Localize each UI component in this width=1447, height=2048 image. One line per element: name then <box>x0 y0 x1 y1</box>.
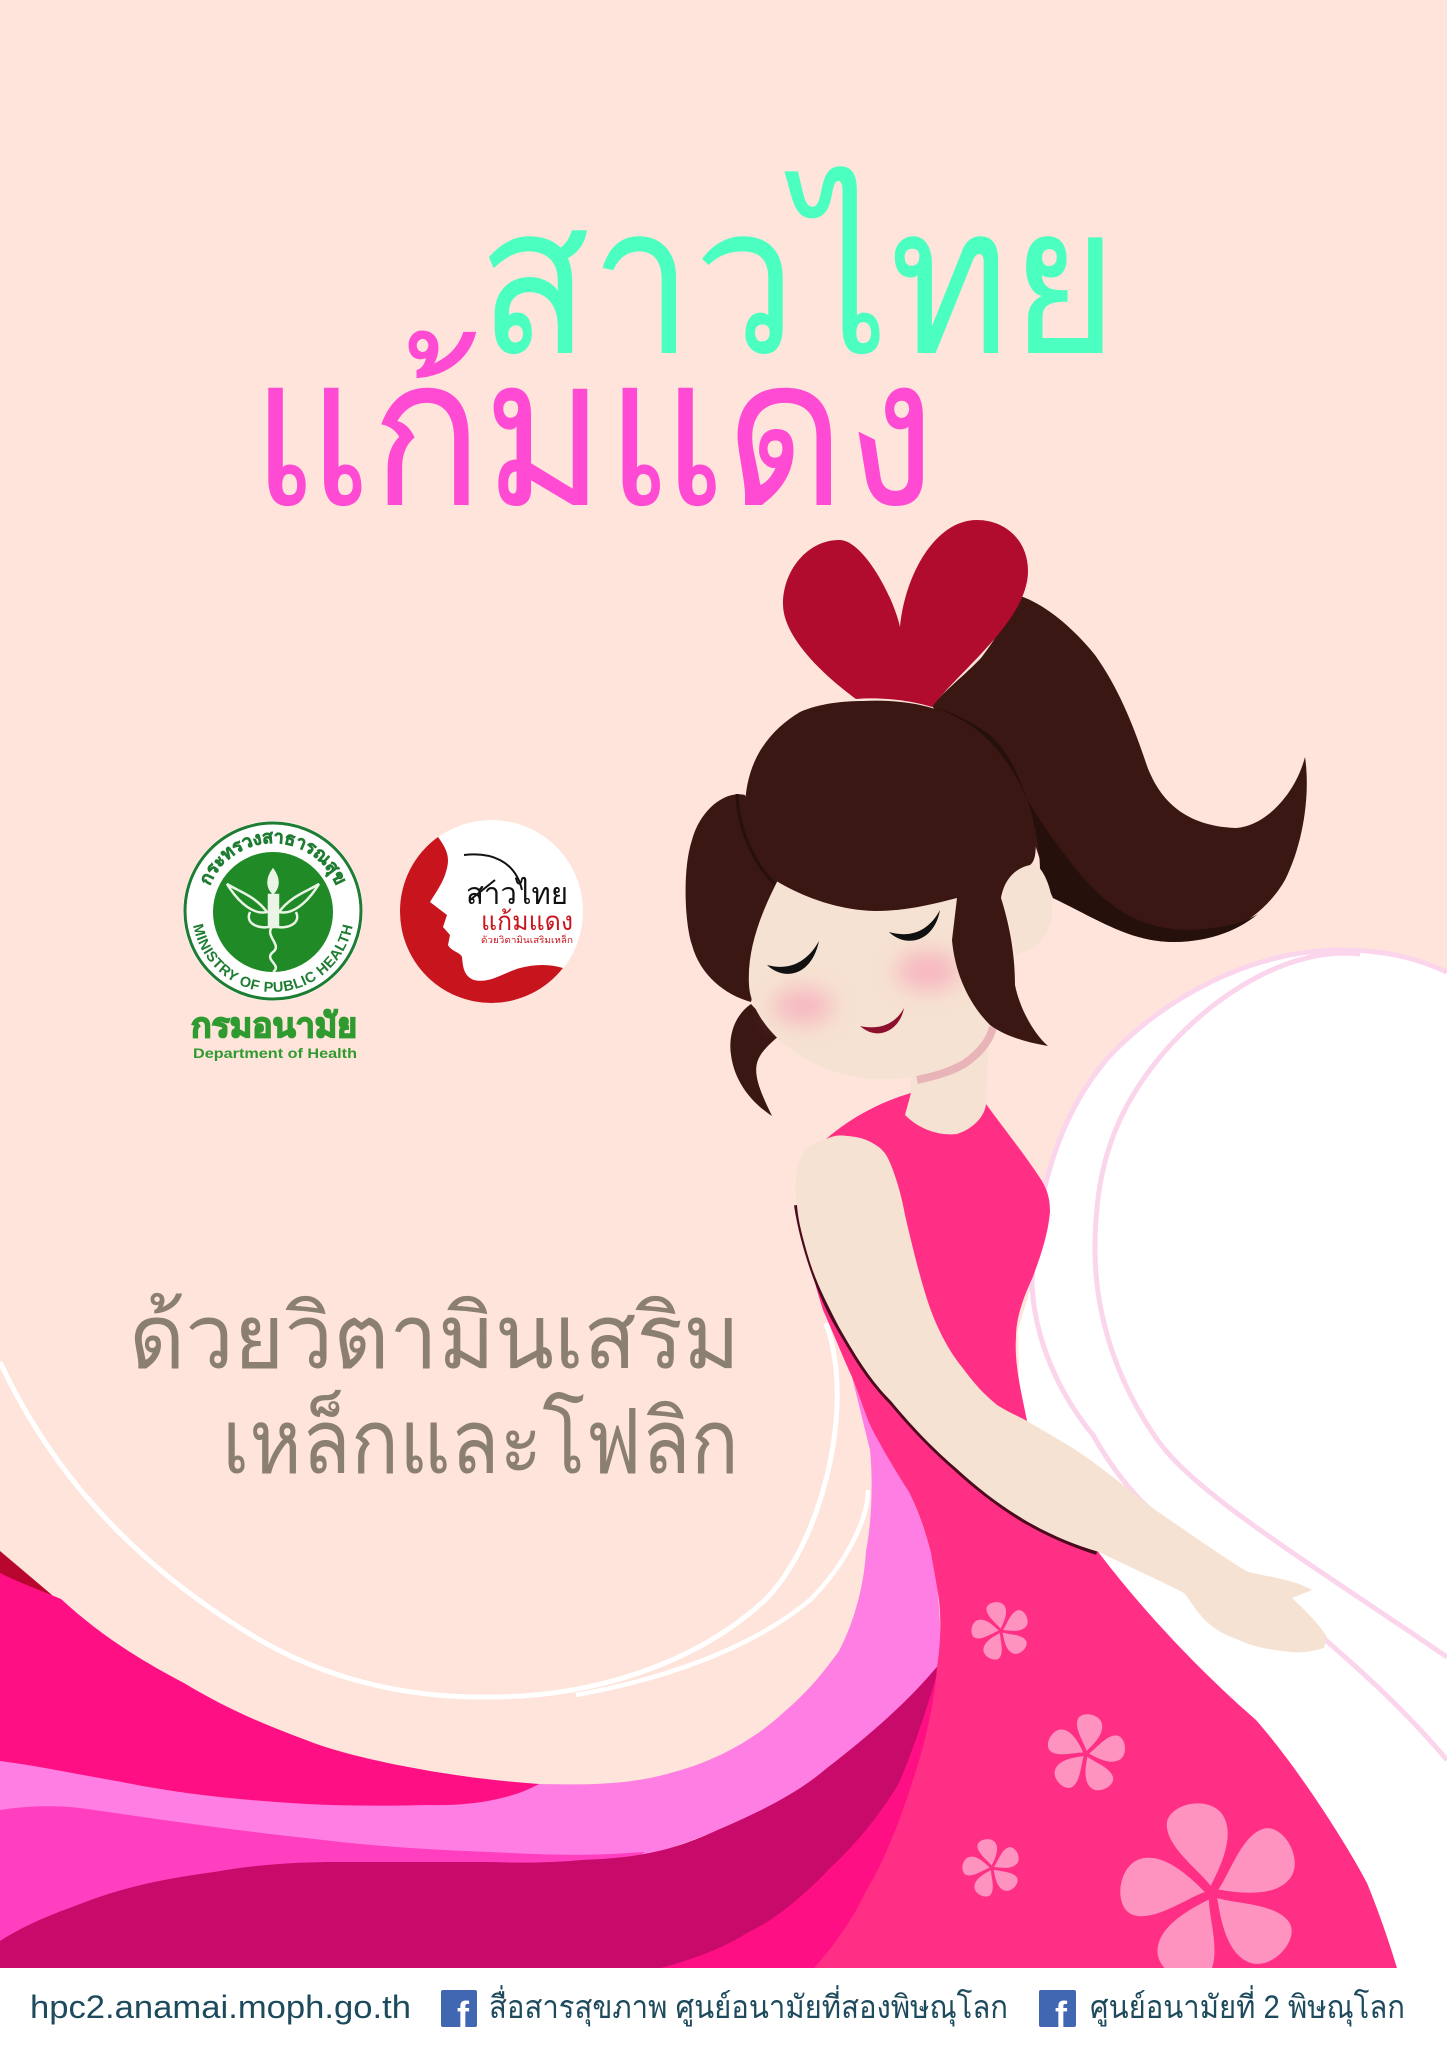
footer band <box>0 1968 1447 2048</box>
logo: ministry of public health emblem: MINISTRY OF PUBLIC HEALTH <box>193 924 352 992</box>
wave: deep pink <box>0 1663 940 1968</box>
white sheet behind the girl <box>1018 950 1447 1968</box>
heart bow <box>783 520 1028 707</box>
hair: fringe and side lock <box>745 701 1048 1046</box>
icon: facebook two <box>1039 1990 1076 2035</box>
flowers on dress <box>956 1597 1322 2002</box>
hair: bun line <box>737 794 775 884</box>
mouth <box>860 1008 904 1033</box>
hair: left bun <box>686 794 778 1002</box>
icon: facebook one: f <box>457 1994 470 2035</box>
hair: ponytail shadow <box>932 706 1258 942</box>
dress <box>799 1093 1397 1968</box>
swoosh: white line two <box>576 1490 868 1695</box>
footer: facebook page two: ศูนย์อนามัยที่ 2 พิษณุโลก <box>1090 1985 1405 2027</box>
title: แก้มแดง: แก้มแดง <box>251 317 936 550</box>
eye left <box>767 941 819 974</box>
footer: facebook page one: สื่อสารสุขภาพ ศูนย์อนามัยที่สองพิษณุโลก <box>489 1985 1008 2027</box>
girl <box>686 520 1397 2002</box>
wave: magenta <box>0 1806 645 1960</box>
ear <box>1003 861 1052 955</box>
neck <box>905 1050 988 1134</box>
logo: thai red cheeks campaign: ด้วยวิตามินเสริมเหล็ก <box>481 933 573 945</box>
hair: ponytail <box>932 595 1307 942</box>
blush right <box>896 951 960 991</box>
logo: thai red cheeks campaign <box>400 820 583 1003</box>
logo: thai red cheeks campaign: แก้มแดง <box>481 906 573 936</box>
footer: website: hpc2.anamai.moph.go.th <box>30 1989 411 2025</box>
flower small top <box>965 1597 1036 1666</box>
icon: facebook two: f <box>1055 1994 1068 2035</box>
logo caption: กรมอนามัย: กรมอนามัย <box>191 1007 357 1045</box>
flower medium <box>1038 1708 1133 1801</box>
wave: dark red sliver <box>0 1551 52 1610</box>
blush left <box>773 988 833 1024</box>
subtitle line 2: เหล็กและโฟลิก <box>222 1388 739 1493</box>
flower small bottom <box>956 1834 1027 1903</box>
logo: thai red cheeks campaign: สาวไทย <box>466 876 568 911</box>
hair: lower curl <box>730 1004 780 1116</box>
logo: ministry of public health emblem: กระทรวงสาธารณสุข <box>202 832 346 886</box>
wave: light pink <box>0 1377 941 1870</box>
flower large <box>1101 1787 1322 2002</box>
icon: facebook one <box>441 1990 477 2035</box>
jaw shadow <box>917 1027 993 1080</box>
arm underside shadow <box>797 1205 1097 1552</box>
wave: bright pink under dress <box>640 1663 950 1968</box>
logo caption: department of health: Department of Health <box>193 1045 357 1061</box>
eye right <box>889 910 940 941</box>
arm and hand <box>796 1135 1327 1652</box>
flowing skirt waves <box>0 1323 950 1968</box>
wave: bright pink top <box>0 1573 539 1806</box>
logo: ministry of public health emblem <box>183 821 363 1001</box>
emblem: winged caduceus <box>227 870 319 972</box>
title: สาวไทย: สาวไทย <box>478 166 1118 398</box>
swoosh: white line one <box>0 1323 837 1697</box>
subtitle line 1: ด้วยวิตามินเสริม <box>129 1288 740 1388</box>
face <box>749 880 1010 1079</box>
